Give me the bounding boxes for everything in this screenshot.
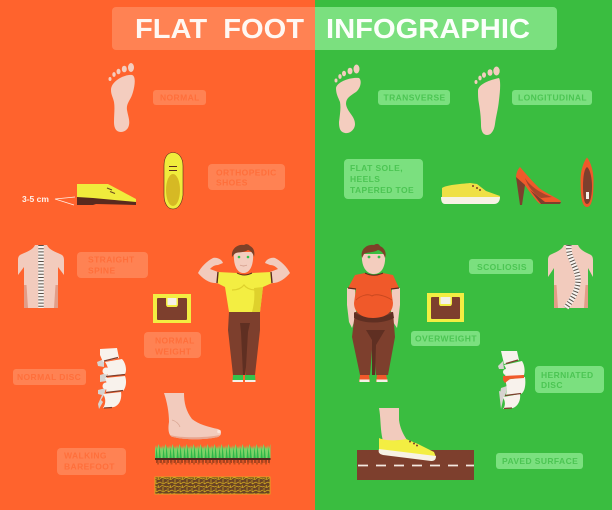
label: walking barefoot: BAREFOOT: [64, 462, 115, 472]
icon: yellow sneaker: [441, 183, 500, 204]
icon: overweight man: [347, 244, 400, 382]
label: normal weight: [144, 332, 201, 358]
orange shirt: [348, 273, 399, 318]
label: paved surface: [496, 453, 583, 469]
icon: normal footprint: [108, 63, 135, 132]
label: orthopedic shoes: [208, 164, 285, 190]
icon: overweight scale: [427, 293, 464, 322]
label: normal weight: WEIGHT: [155, 346, 192, 356]
icon: normal vertebrae: [97, 348, 126, 409]
label: normal disc: [13, 369, 86, 385]
label: flat sole, heels, tapered toe: TAPERED TOE: [350, 185, 414, 195]
arms: [198, 258, 223, 283]
title: INFOGRAPHIC: [326, 13, 530, 44]
label: scoliosis: SCOLIOSIS: [477, 262, 527, 272]
label: overweight: [411, 331, 480, 346]
icon: foot in sneaker: [379, 408, 436, 461]
label: orthopedic shoes: SHOES: [216, 178, 248, 188]
icon: gravel strip: [155, 477, 270, 494]
label: overweight: OVERWEIGHT: [415, 334, 477, 344]
icon: orthopedic shoe top view: [164, 152, 183, 209]
label: longitudinal: LONGITUDINAL: [518, 92, 587, 102]
icon: straight spine back: [18, 245, 64, 308]
label: straight spine: STRAIGHT: [88, 254, 135, 264]
label: walking barefoot: [57, 448, 126, 475]
label: normal disc: NORMAL DISC: [17, 372, 81, 382]
label: scoliosis: [469, 259, 533, 274]
icon: bare foot: [164, 393, 221, 439]
hair: [362, 244, 386, 258]
trousers: [228, 312, 260, 375]
label: straight spine: SPINE: [88, 266, 116, 276]
arms: [347, 288, 356, 328]
label: herniated disc: DISC: [541, 380, 563, 390]
icon: orthopedic shoe side view: [77, 184, 136, 205]
label: transverse: TRANSVERSE: [384, 92, 446, 102]
head: [362, 254, 385, 274]
callout: 3-5 cm heel height: 3-5 cm: [22, 194, 49, 204]
hair: [232, 244, 254, 257]
icon: transverse footprint: [334, 64, 361, 133]
icon: grass with soil: [155, 443, 270, 464]
label: herniated disc: HERNIATED: [541, 370, 594, 380]
icon: herniated vertebrae: [498, 351, 525, 409]
icon: scoliosis back: [548, 245, 593, 308]
label: normal weight: NORMAL: [155, 336, 195, 346]
panel: flat foot side background: [315, 0, 612, 510]
label: flat sole, heels, tapered toe: HEELS: [350, 174, 380, 184]
label: normal: [153, 90, 206, 105]
shoes: [232, 375, 243, 382]
title: FLAT FOOT: [135, 13, 304, 44]
trousers: [352, 312, 395, 375]
icon: red high heel side view: [516, 167, 561, 205]
title: [112, 7, 557, 50]
icon: longitudinal footprint: [474, 66, 500, 135]
panel: normal foot side background: [0, 0, 315, 510]
icon: muscular man: [198, 244, 290, 382]
icon: normal weight scale: [153, 294, 191, 323]
label: flat sole, heels, tapered toe: FLAT SOLE,: [350, 163, 403, 173]
icon: red high heel top view: [580, 158, 594, 207]
yellow shirt: [217, 272, 272, 312]
label: orthopedic shoes: ORTHOPEDIC: [216, 168, 277, 178]
label: herniated disc: [535, 366, 604, 393]
shoes: [359, 375, 370, 382]
icon: paved road: [357, 450, 474, 480]
callout: 3-5 cm heel height: [22, 194, 75, 205]
label: transverse: [378, 90, 450, 105]
label: normal: NORMAL: [160, 92, 200, 102]
label: longitudinal: [512, 90, 592, 105]
label: paved surface: PAVED SURFACE: [502, 456, 578, 466]
head: [234, 252, 253, 273]
label: flat sole, heels, tapered toe: [344, 159, 423, 199]
label: walking barefoot: WALKING: [64, 450, 107, 460]
label: straight spine: [77, 252, 148, 278]
